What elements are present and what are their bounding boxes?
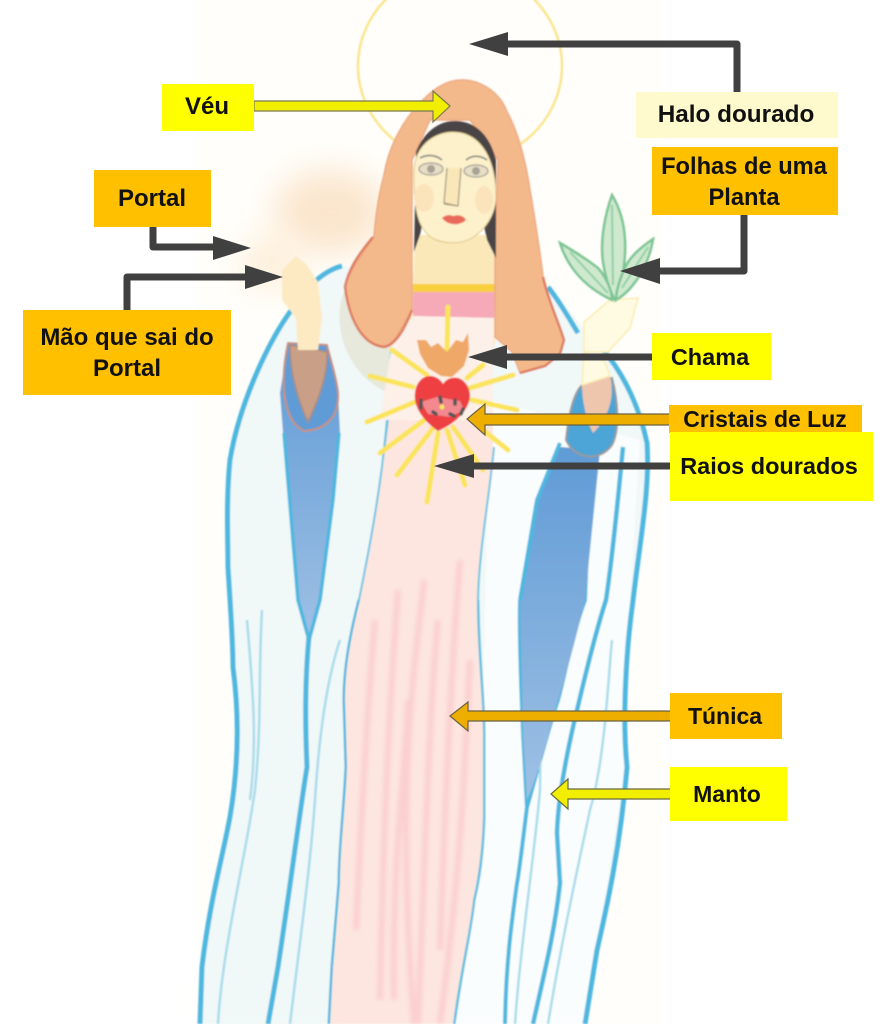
label: Túnica	[670, 693, 782, 739]
label: Halo dourado: Halo dourado	[658, 101, 814, 128]
label: Chama: Chama	[671, 344, 750, 370]
hand: right	[582, 298, 638, 385]
drawing: Virgin figure	[200, 0, 653, 1024]
leaves	[560, 195, 653, 300]
hair	[414, 121, 496, 258]
label: Folhas de uma Planta: Folhas de uma	[661, 154, 828, 180]
tunic	[330, 340, 493, 1024]
veil	[345, 80, 564, 373]
arrow: cristais de luz	[467, 404, 672, 435]
hand: left	[282, 256, 322, 350]
label: Manto	[670, 767, 787, 821]
label: Folhas de uma Planta: Planta	[708, 185, 780, 211]
arrow: halo dourado	[469, 32, 737, 92]
sleeve: left	[280, 343, 340, 640]
mantle inner folds	[360, 350, 392, 600]
shoulder shading	[339, 290, 395, 395]
label: Raios dourados	[670, 432, 873, 501]
heart	[415, 376, 470, 431]
label: Mão que sai do Portal: Portal	[93, 355, 161, 382]
label: Folhas de uma Planta	[652, 147, 838, 215]
mantle	[200, 266, 648, 1024]
arrow: mão que sai do portal	[127, 265, 283, 310]
label: Véu: Véu	[185, 93, 229, 120]
arrow: véu	[254, 91, 450, 122]
neck and chest	[380, 235, 495, 420]
arrow: manto	[551, 779, 672, 809]
arrow: folhas	[620, 215, 744, 284]
label: Portal	[94, 170, 211, 227]
label: Raios dourados: Raios dourados	[680, 453, 858, 479]
paper background	[197, 0, 662, 1024]
face	[414, 132, 496, 243]
label: Mão que sai do Portal	[23, 310, 231, 395]
rays	[367, 307, 517, 502]
label: Véu	[162, 84, 254, 131]
label: Manto: Manto	[693, 781, 761, 807]
label: Portal: Portal	[118, 185, 186, 212]
arrow: chama	[468, 345, 652, 369]
label: Halo dourado	[636, 92, 838, 138]
arrow: portal	[153, 227, 251, 260]
arrow: raios dourados	[434, 454, 672, 478]
flame	[417, 333, 469, 377]
arrow: túnica	[450, 702, 672, 731]
label: Chama	[652, 333, 771, 380]
veil outline accents	[345, 237, 564, 373]
sleeve: right	[520, 376, 617, 800]
label: Cristais de Luz: Cristais de Luz	[683, 406, 847, 432]
label: Mão que sai do Portal: Mão que sai do	[40, 324, 214, 351]
label: Túnica: Túnica	[688, 703, 762, 729]
halo ring	[358, 0, 562, 163]
